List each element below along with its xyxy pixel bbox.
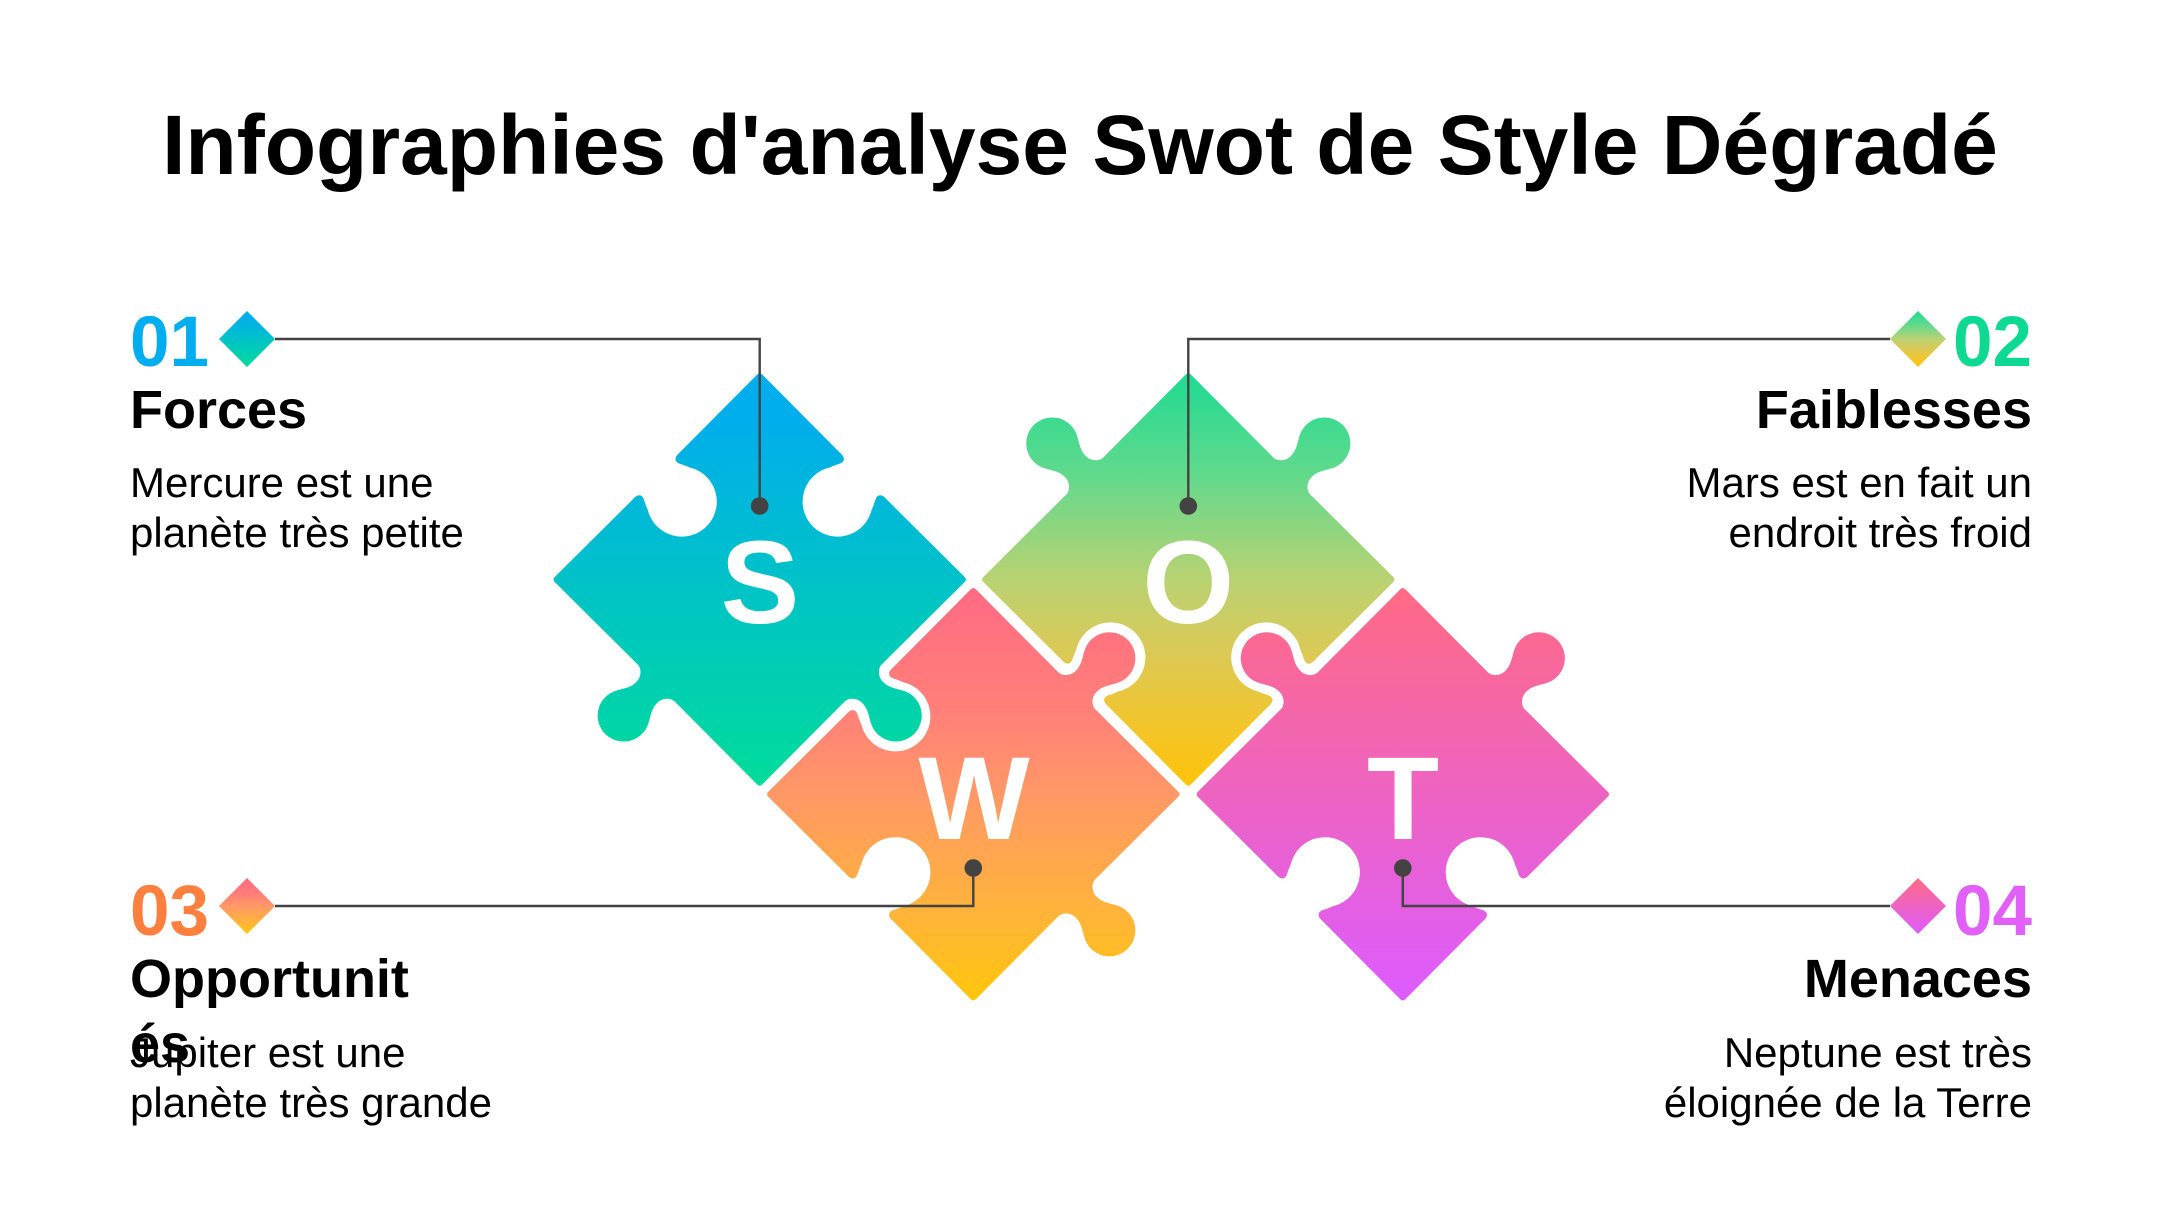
block 02 Faiblesses: 02	[1953, 303, 2032, 382]
block 01 Forces: planète très petite	[130, 509, 464, 556]
block 03 Opportunités: Opportunit	[130, 949, 409, 1009]
block 01 Forces	[130, 303, 464, 556]
block 03 Opportunités: és	[130, 1014, 190, 1074]
block 02 Faiblesses	[1686, 303, 2032, 556]
puzzle piece T	[1197, 588, 1609, 1001]
block 04 Menaces: Menaces	[1804, 949, 2032, 1009]
connector 01	[275, 339, 768, 515]
block 02 Faiblesses: Mars est en fait un	[1686, 459, 2032, 506]
block 03 Opportunités: 03	[130, 872, 209, 951]
connector 03	[275, 859, 982, 906]
puzzle piece O	[982, 373, 1395, 786]
block 01 Forces: Forces	[130, 380, 307, 440]
block 03 Opportunités: planète très grande	[130, 1079, 492, 1126]
letter S: S	[721, 517, 799, 649]
block 04 Menaces: 04	[1953, 872, 2033, 951]
letter W: W	[918, 733, 1030, 865]
block 01 Forces: Mercure est une	[130, 459, 433, 506]
puzzle piece S	[553, 373, 966, 786]
connector 02	[1180, 339, 1890, 515]
block 03 Opportunités	[130, 872, 492, 1126]
letter O: O	[1142, 517, 1234, 649]
block 01 Forces: 01	[130, 303, 209, 382]
icon: diamond 02	[1890, 311, 1946, 367]
block 02 Faiblesses: Faiblesses	[1756, 380, 2032, 440]
icon: diamond 01	[219, 311, 275, 367]
block 04 Menaces	[1664, 872, 2033, 1126]
block 04 Menaces: Neptune est très	[1724, 1029, 2032, 1076]
puzzle piece W	[767, 588, 1180, 1001]
icon: diamond 04	[1890, 878, 1946, 934]
icon: diamond 03	[219, 878, 275, 934]
block 03 Opportunités: Jupiter est une	[130, 1029, 406, 1076]
block 04 Menaces: éloignée de la Terre	[1664, 1079, 2032, 1126]
title: Infographies d'analyse Swot de Style Dégradé	[162, 98, 1998, 192]
block 02 Faiblesses: endroit très froid	[1729, 509, 2032, 556]
letter T: T	[1367, 733, 1439, 865]
connector 04	[1394, 859, 1890, 906]
